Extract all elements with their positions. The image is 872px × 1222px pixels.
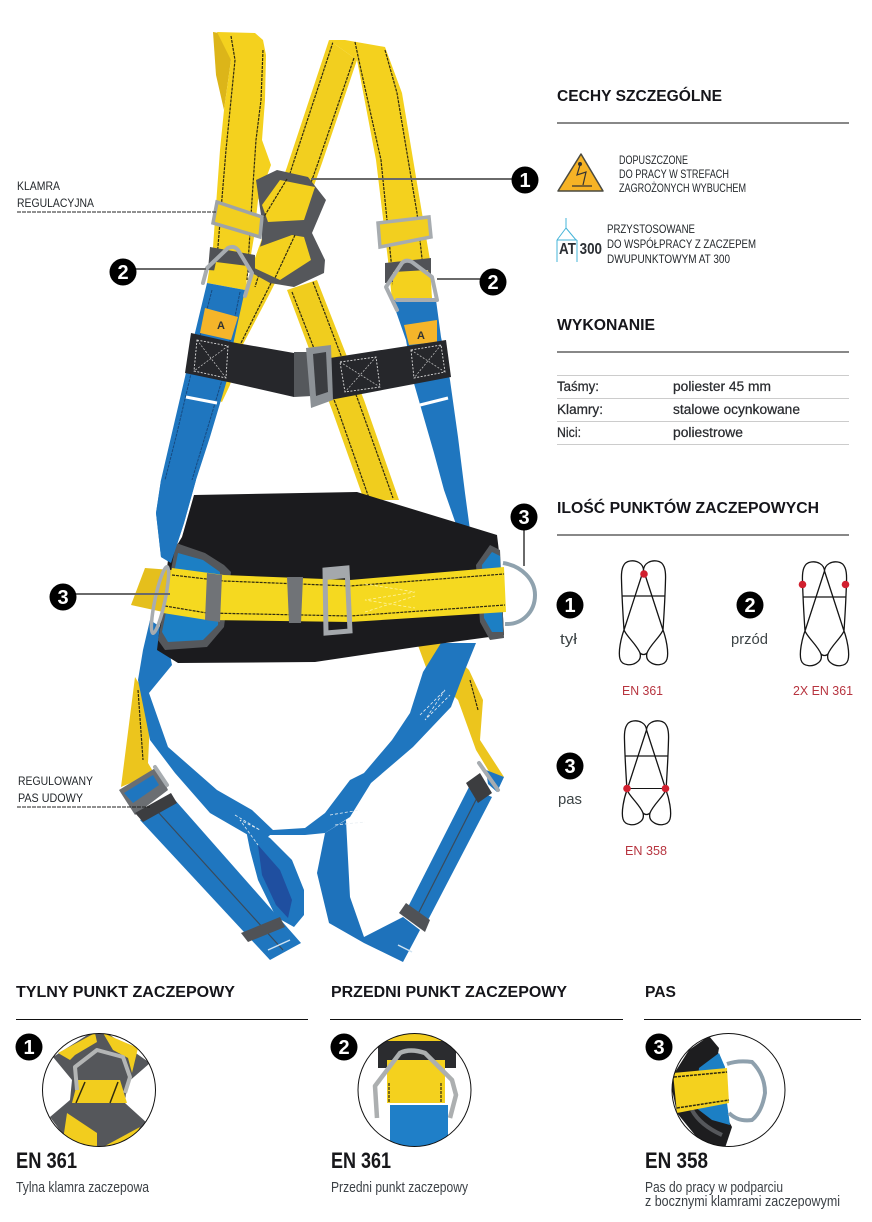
heading: rear attachment: TYLNY PUNKT ZACZEPOWY	[16, 984, 236, 1001]
item: belt points: EN 358	[625, 843, 667, 858]
item: belt points: 3	[564, 756, 576, 778]
strap keepers	[241, 903, 430, 952]
callout: back attachment 1: 1	[519, 170, 531, 192]
blue thigh straps	[138, 620, 492, 962]
blue shoulder straps	[156, 283, 470, 563]
heading: front attachment: PRZEDNI PUNKT ZACZEPOWY	[331, 984, 568, 1001]
panel: construction table: Taśmy:	[557, 379, 599, 394]
harness photo illustration	[119, 32, 535, 962]
icon: AT 300 anchor	[557, 218, 602, 262]
label: adjustment buckle	[17, 179, 216, 212]
label: adjustment buckle: KLAMRA	[17, 179, 60, 193]
text: AT 300 compatibility: DWUPUNKTOWYM AT 300	[607, 252, 730, 266]
callout: front attachment 2 right	[437, 268, 506, 296]
badge 2	[330, 1034, 358, 1060]
photo circle: belt ring	[670, 1033, 785, 1148]
standard: EN 361: EN 361	[16, 1148, 77, 1173]
badge 1	[16, 1034, 42, 1060]
leg buckles	[119, 763, 504, 822]
left strap over pad	[156, 480, 196, 563]
panel: belt	[644, 984, 861, 1210]
item: belt points: pas	[558, 791, 582, 808]
badge 3: 3	[653, 1037, 665, 1059]
description: belt: Pas do pracy w podparciu	[645, 1180, 783, 1196]
panel: construction table: Klamry:	[557, 402, 603, 417]
heading: construction: WYKONANIE	[557, 317, 655, 334]
description: rear buckle: Tylna klamra zaczepowa	[16, 1180, 150, 1196]
panel: number of anchor points	[556, 499, 853, 858]
text: explosion zones	[619, 153, 746, 195]
badge 3	[646, 1034, 672, 1060]
panel: construction table: poliester 45 mm	[673, 379, 771, 394]
belt side rings	[148, 563, 535, 634]
standard: EN 358: EN 358	[645, 1148, 708, 1173]
panel: rear attachment point	[16, 984, 308, 1196]
label: adjustable thigh strap: PAS UDOWY	[18, 791, 83, 805]
item: back point: tył	[560, 631, 578, 648]
text: explosion zones: ZAGROŻONYCH WYBUCHEM	[619, 181, 746, 195]
photo circle: front D-ring	[358, 1033, 471, 1147]
item: back point: EN 361	[622, 683, 663, 698]
standard: EN 361 front: EN 361	[331, 1148, 391, 1173]
panel: front attachment point	[330, 984, 623, 1196]
callout: front attachment 2 right: 2	[487, 272, 499, 294]
icon: explosion hazard triangle	[558, 154, 603, 191]
item: front points: 2X EN 361	[793, 683, 853, 698]
callout: back attachment 1	[311, 166, 538, 194]
panel: construction table: Nici:	[557, 425, 581, 440]
callout: belt attachment 3 left: 3	[57, 587, 69, 609]
heading: special features: CECHY SZCZEGÓLNE	[557, 87, 722, 105]
panel: construction table	[557, 317, 849, 444]
text: explosion zones: DO PRACY W STREFACH	[619, 167, 729, 181]
badge 1: 1	[23, 1037, 35, 1059]
callout: front attachment 2 left	[110, 258, 206, 286]
back pad	[157, 492, 504, 663]
photo circle: rear D-ring	[42, 1030, 156, 1150]
text: AT 300 compatibility: DO WSPÓŁPRACY Z ZACZEPEM	[607, 236, 756, 251]
small adjuster buckles	[213, 202, 431, 247]
item: front points	[731, 562, 853, 698]
item: back point: 1	[564, 595, 576, 617]
strap label: right A: A	[417, 330, 425, 342]
strap label: left A: A	[217, 320, 225, 332]
badge 2: 2	[338, 1037, 350, 1059]
icon: gray back plate	[252, 170, 326, 287]
panel: construction table: poliestrowe	[673, 425, 743, 440]
blue pad inserts	[158, 543, 504, 650]
item: belt points	[556, 721, 671, 858]
label: adjustment buckle: REGULACYJNA	[17, 196, 94, 210]
description: front point: Przedni punkt zaczepowy	[331, 1180, 469, 1196]
strap label: right A	[404, 320, 437, 345]
item: front points: 2	[744, 595, 756, 617]
callout: belt attachment 3 right: 3	[518, 507, 530, 529]
thigh straps yellow	[121, 640, 504, 787]
label: adjustable thigh strap: REGULOWANY	[18, 774, 93, 788]
icon: AT 300 anchor: AT 300	[559, 241, 602, 258]
D-rings at chest	[203, 247, 437, 310]
strap label: left A	[200, 308, 238, 340]
item: back point	[556, 561, 668, 698]
callout: front attachment 2 left: 2	[117, 262, 129, 284]
belt loops	[205, 573, 303, 623]
heading: belt: PAS	[645, 984, 676, 1001]
crossing yellow back straps	[205, 32, 432, 500]
waist belt	[131, 567, 506, 633]
description: belt	[645, 1180, 840, 1210]
text: AT 300 compatibility: PRZYSTOSOWANE	[607, 222, 695, 236]
callout: belt attachment 3 right	[510, 504, 538, 566]
label: adjustable thigh strap	[17, 774, 150, 807]
description: belt: z bocznymi klamrami zaczepowymi	[645, 1194, 840, 1210]
text: AT 300 compatibility	[607, 222, 756, 266]
chest strap	[185, 333, 451, 408]
callout: belt attachment 3 left	[50, 584, 170, 610]
belt buckle	[325, 568, 350, 633]
panel: special features	[557, 87, 849, 266]
panel: construction table: stalowe ocynkowane	[673, 402, 800, 417]
item: front points: przód	[731, 631, 768, 648]
heading: anchor points: ILOŚĆ PUNKTÓW ZACZEPOWYCH	[557, 499, 819, 517]
text: explosion zones: DOPUSZCZONE	[619, 153, 688, 167]
